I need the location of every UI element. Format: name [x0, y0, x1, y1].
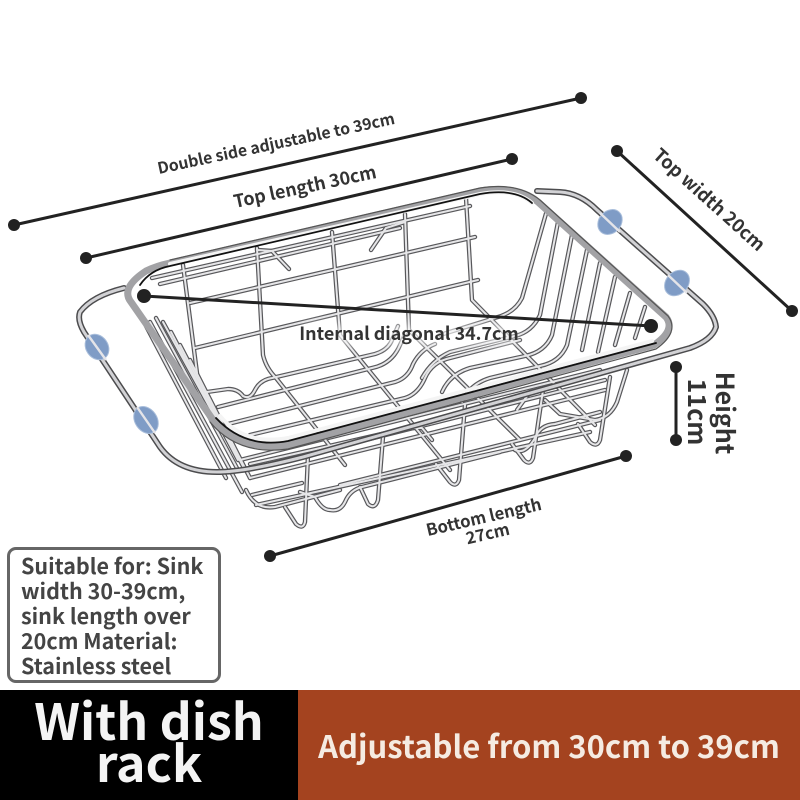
label: internal diagonal: Internal diagonal 34.7cm — [299, 320, 519, 346]
label: bottom length: Bottom length — [424, 491, 544, 541]
dimension: top length — [80, 153, 518, 264]
callout: suitability note — [7, 547, 221, 683]
label: height: Height — [708, 372, 744, 455]
banner: adjustable range — [298, 690, 800, 800]
banner: with dish rack: With dish — [34, 683, 264, 755]
label: top width: Top width 20cm — [648, 142, 771, 257]
callout: suitability note: width 30-39cm, — [21, 575, 185, 606]
grip rods — [88, 213, 687, 433]
basket wires — [146, 198, 645, 527]
banner: with dish rack — [0, 690, 298, 800]
banner: with dish rack: rack — [96, 725, 202, 797]
callout: suitability note: Suitable for: Sink — [21, 550, 203, 581]
label: double side adjustable: Double side adjustable to 39cm — [155, 106, 397, 179]
label: 11cm: 11cm — [680, 379, 716, 445]
dimension: bottom length — [264, 450, 632, 562]
icon: blue grips — [80, 205, 695, 438]
dimension: height — [670, 361, 682, 446]
extension rack — [79, 191, 716, 472]
dimension: double side — [8, 92, 587, 231]
label: top length: Top length 30cm — [231, 158, 379, 214]
callout: suitability note: Stainless steel — [21, 650, 171, 681]
callout: suitability note: 20cm Material: — [21, 625, 177, 656]
dimension: top width — [611, 145, 798, 317]
label: bottom length: 27cm — [463, 516, 512, 549]
top rim — [128, 186, 672, 450]
banner: adjustable range: Adjustable from 30cm to 39cm — [318, 722, 780, 767]
diagonal label haze — [305, 326, 515, 344]
dimension: internal diagonal — [137, 289, 658, 333]
callout: suitability note: sink length over — [21, 600, 191, 631]
